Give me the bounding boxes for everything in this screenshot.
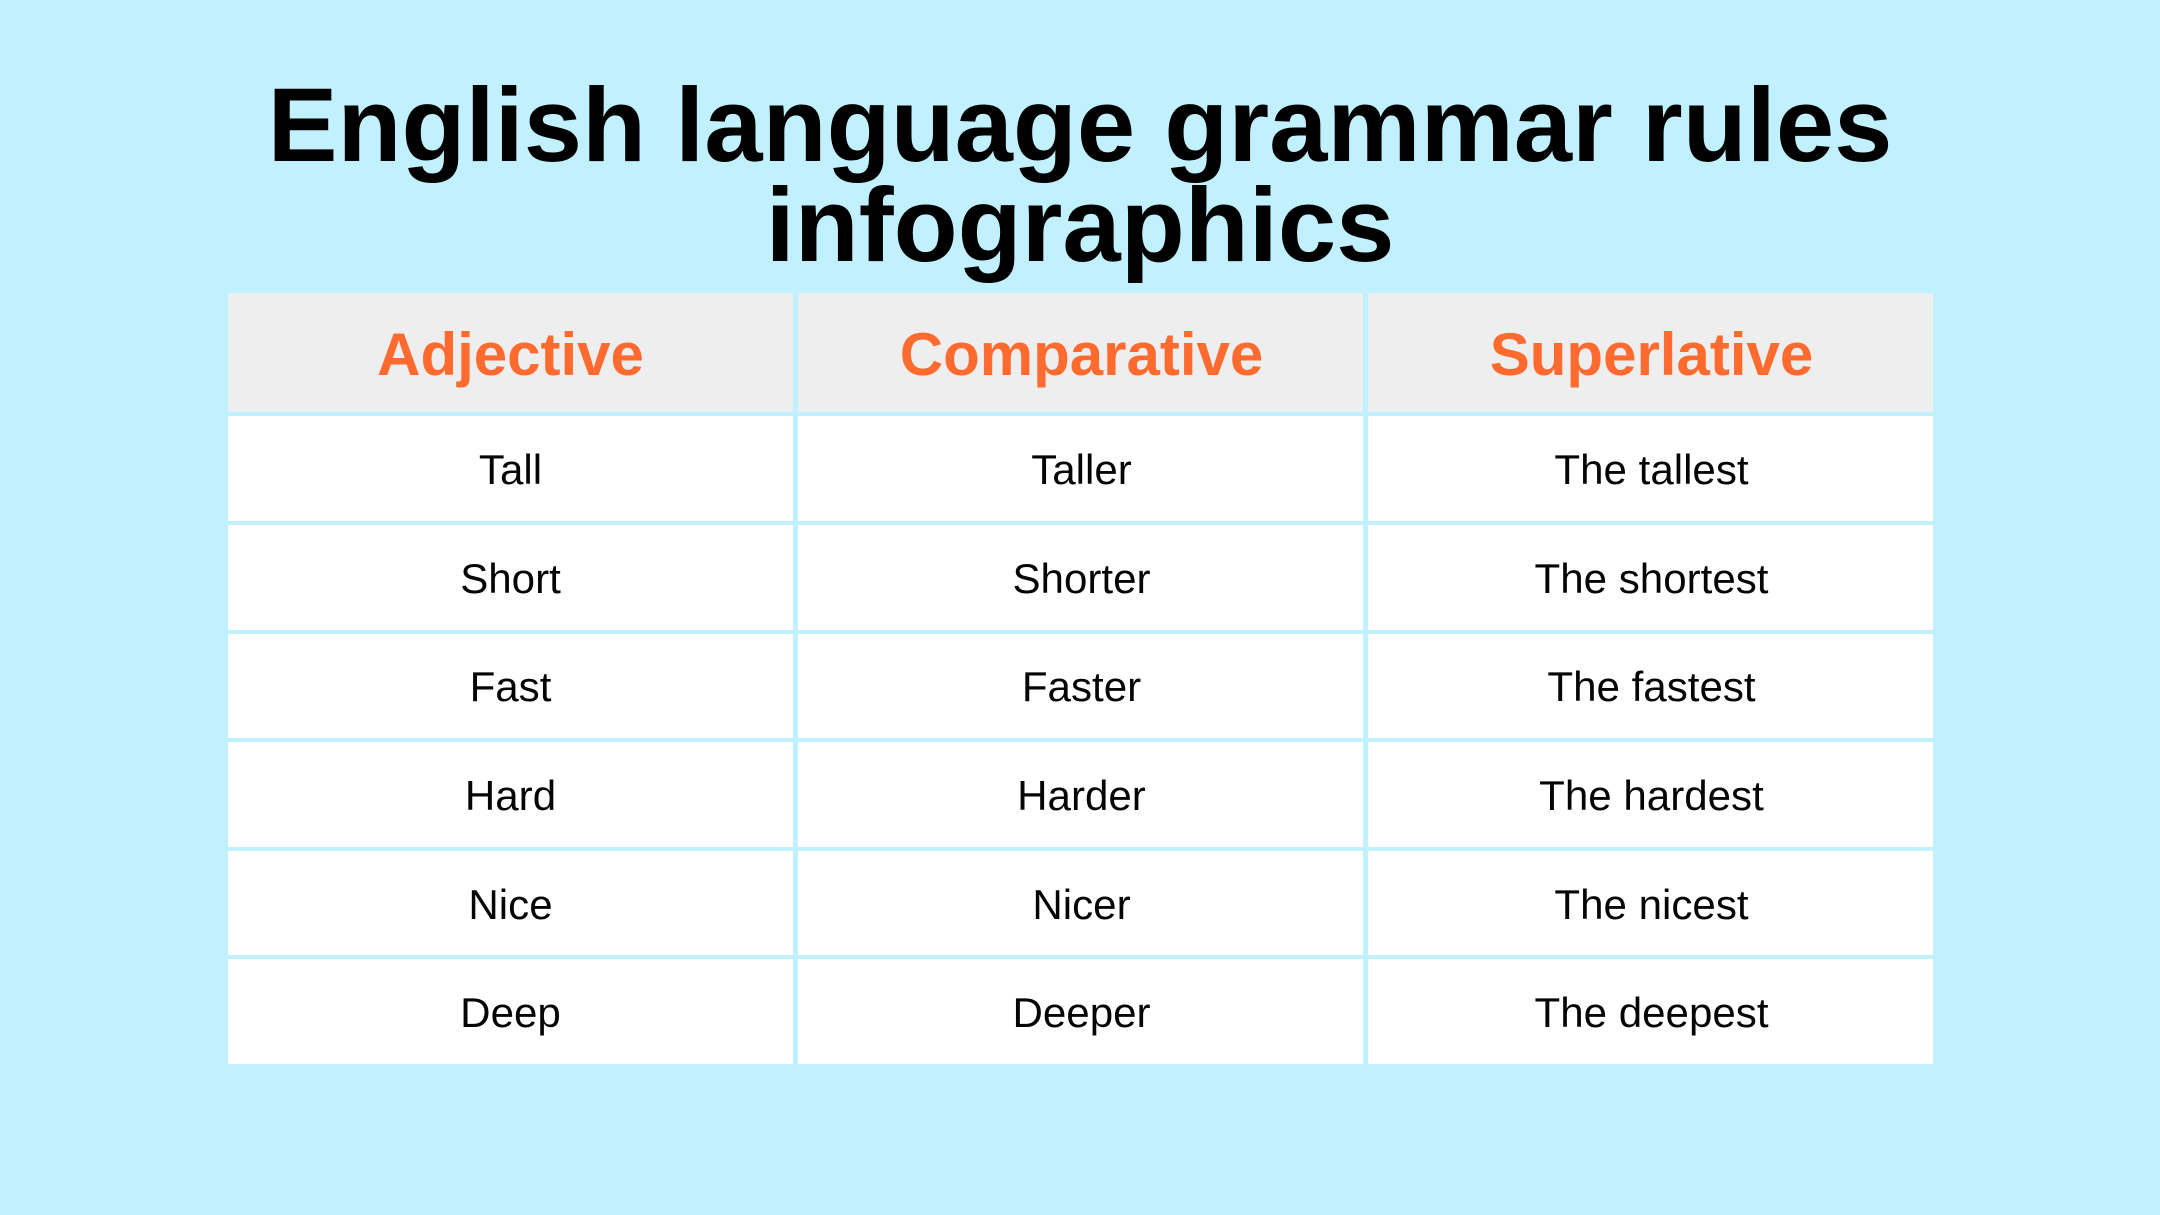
header: Adjective: Adjective	[377, 321, 644, 388]
cell: The nicest	[1368, 851, 1933, 955]
cell: The fastest	[1368, 634, 1933, 738]
cell: Hard: Hard	[465, 772, 556, 819]
header: Superlative	[1368, 293, 1933, 412]
cell: Fast: Fast	[470, 663, 551, 710]
header: Comparative	[798, 293, 1363, 412]
cell: Nicer	[798, 851, 1363, 955]
cell: Taller	[798, 416, 1363, 521]
cell: Nicer: Nicer	[1032, 880, 1131, 928]
cell: Shorter: Shorter	[1012, 555, 1151, 602]
header: Adjective	[228, 293, 793, 412]
cell: Tall	[228, 416, 793, 521]
cell: Faster	[798, 634, 1363, 738]
cell: The hardest: The hardest	[1539, 772, 1764, 819]
cell: Shorter	[798, 525, 1363, 630]
cell: Hard	[228, 742, 793, 847]
cell: The tallest	[1368, 416, 1933, 521]
cell: The hardest	[1368, 742, 1933, 847]
cell: Fast	[228, 634, 793, 738]
cell: The nicest: The nicest	[1554, 880, 1749, 928]
cell: Deep	[228, 959, 793, 1064]
title: infographics	[766, 167, 1394, 284]
cell: Short	[228, 525, 793, 630]
cell: Harder: Harder	[1017, 772, 1146, 819]
cell: Deeper	[798, 959, 1363, 1064]
header: Comparative: Comparative	[900, 321, 1263, 388]
cell: Deeper: Deeper	[1012, 989, 1151, 1036]
title	[268, 67, 1892, 284]
cell: Short: Short	[460, 555, 561, 602]
cell: Nice: Nice	[468, 880, 553, 928]
title: English language grammar rules	[268, 67, 1892, 184]
header: Superlative: Superlative	[1490, 321, 1813, 388]
cell: The tallest: The tallest	[1554, 446, 1749, 493]
cell: The deepest: The deepest	[1534, 989, 1769, 1036]
cell: The shortest	[1368, 525, 1933, 630]
cell: Deep: Deep	[460, 989, 561, 1036]
cell: Harder	[798, 742, 1363, 847]
cell: Tall: Tall	[479, 446, 542, 493]
cell: Taller: Taller	[1031, 446, 1132, 493]
cell: The shortest: The shortest	[1535, 555, 1768, 602]
cell: Nice	[228, 851, 793, 955]
cell: The deepest	[1368, 959, 1933, 1064]
cell: Faster: Faster	[1022, 663, 1141, 710]
cell: The fastest: The fastest	[1547, 663, 1756, 710]
